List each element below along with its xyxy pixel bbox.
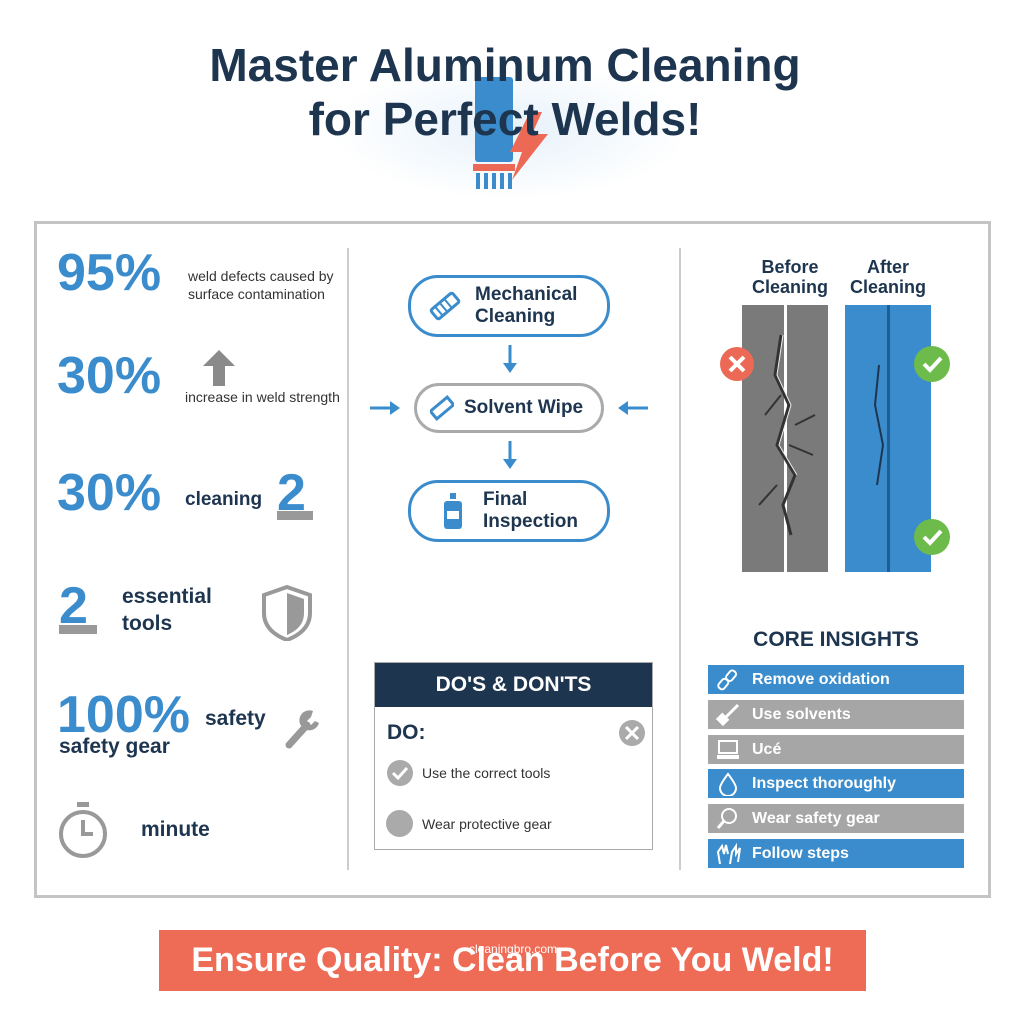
before / after comparison: Before: [761, 257, 818, 277]
footer banner: Ensure Quality: Clean Before You Weld!: [191, 941, 834, 979]
stats column: safety: [205, 707, 266, 730]
stat 95%: 95%: [57, 244, 161, 302]
step: solvent wipe: [414, 383, 604, 433]
stat 30% cleaning: 30%: [57, 464, 161, 522]
insights list: Wear safety gear: [752, 810, 880, 826]
stats column: [57, 244, 340, 858]
header background glow: [330, 60, 690, 200]
footer banner: cleaningbro.com: [469, 942, 557, 956]
main panel: [34, 221, 991, 898]
stats column: weld defects caused by: [188, 268, 334, 284]
do's and don'ts box: DO'S & DON'TS: [436, 673, 591, 696]
do's and don'ts box: [374, 662, 653, 850]
step: mechanical cleaning: Cleaning: [475, 306, 555, 327]
side arrows: [370, 401, 400, 415]
arrow down 2: [503, 441, 517, 469]
step: final inspection: [408, 480, 610, 542]
title: Master Aluminum Cleaning: [209, 39, 801, 91]
insights list: Use solvents: [752, 706, 851, 722]
insights list: [708, 665, 964, 868]
stats column: safety gear: [59, 735, 170, 758]
title: for Perfect Welds!: [309, 93, 701, 145]
arrow down: [503, 345, 517, 373]
stats column: cleaning: [185, 489, 262, 510]
core insights heading: CORE INSIGHTS: [753, 628, 919, 651]
do's and don'ts box: Use the correct tools: [422, 765, 550, 781]
stat 30% strength: 30%: [57, 347, 161, 405]
step: mechanical cleaning: [408, 275, 610, 337]
step: solvent wipe: Solvent Wipe: [464, 397, 583, 418]
icon: brush with lightning: [473, 77, 548, 189]
do's and don'ts box: Wear protective gear: [422, 816, 552, 832]
process flow: [370, 275, 648, 542]
stats column: increase in weld strength: [185, 389, 340, 405]
stat 2 tools: 2: [59, 577, 88, 635]
stats column: minute: [141, 818, 210, 841]
before / after comparison: After: [867, 257, 909, 277]
step: mechanical cleaning: Mechanical: [475, 284, 577, 305]
stats column: 2: [277, 464, 306, 522]
do's and don'ts box: DO:: [387, 721, 426, 744]
before / after comparison: Cleaning: [752, 277, 828, 297]
stat 100%: 100%: [57, 686, 190, 744]
stats column: tools: [122, 612, 172, 635]
step: final inspection: Final: [483, 489, 527, 510]
stats column: surface contamination: [188, 286, 325, 302]
insights list: Uсé: [752, 740, 781, 758]
insights list: Follow steps: [752, 844, 849, 862]
insights list: Inspect thoroughly: [752, 774, 896, 792]
stats column: essential: [122, 585, 212, 608]
title: [209, 39, 801, 145]
step: final inspection: Inspection: [483, 511, 578, 532]
footer banner: [159, 930, 866, 991]
stopwatch icon: [59, 802, 107, 858]
before / after comparison: [720, 257, 950, 572]
before / after comparison: Cleaning: [850, 277, 926, 297]
insights list: Remove oxidation: [752, 670, 890, 688]
